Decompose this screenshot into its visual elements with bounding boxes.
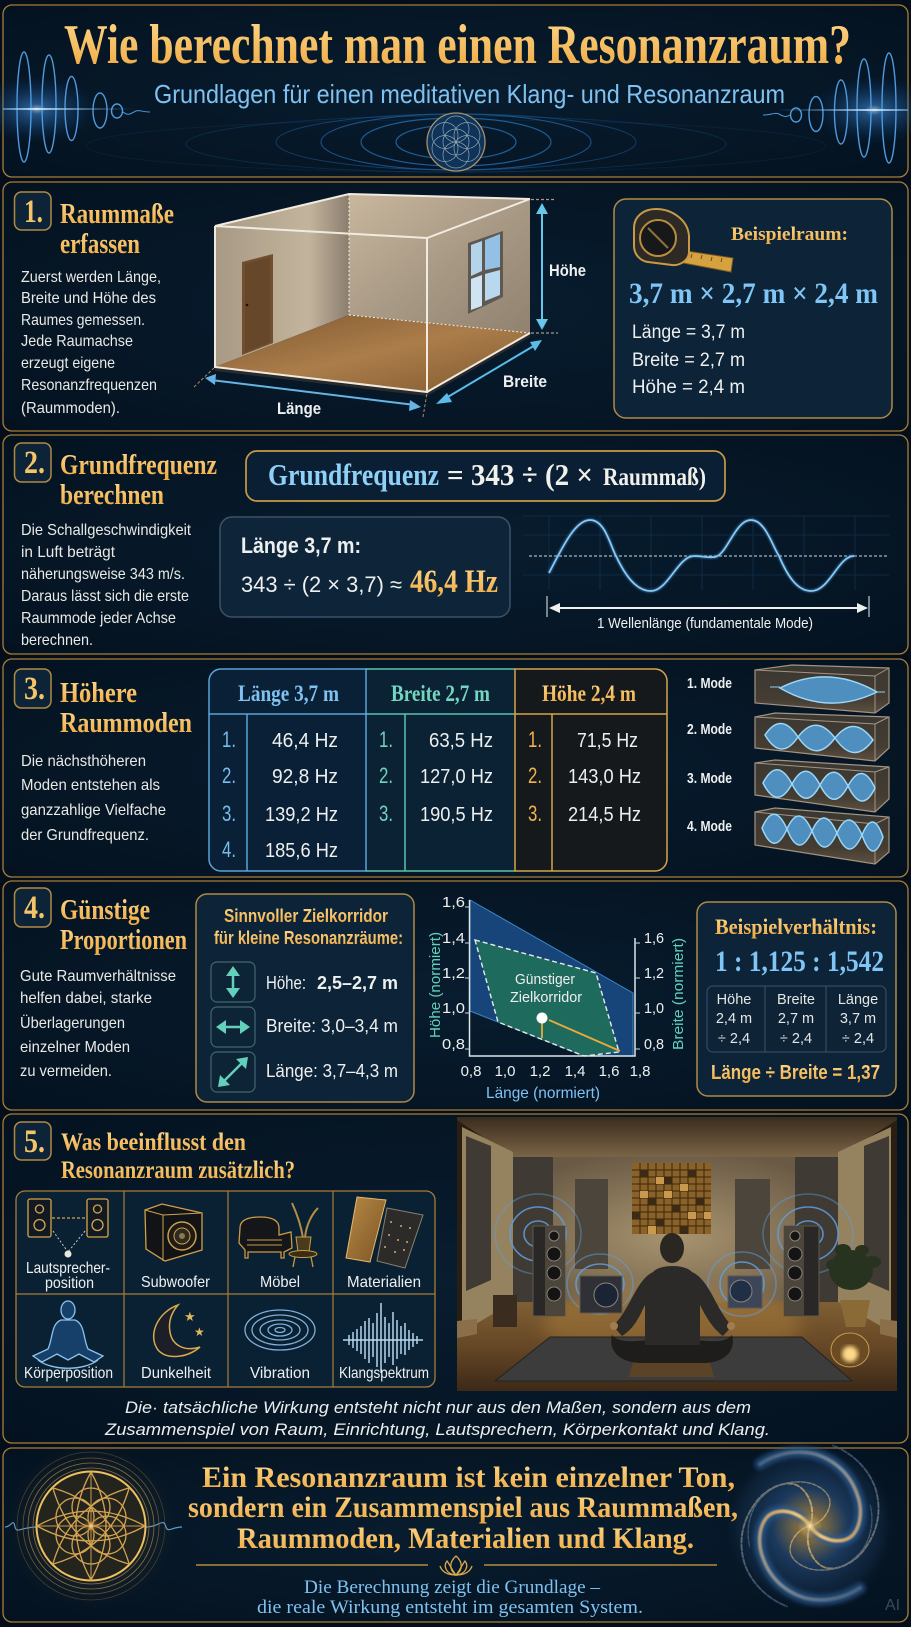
door: [242, 254, 273, 355]
heading: Raummaße: [60, 198, 174, 230]
chart: target corridor: 0,8: [461, 1063, 481, 1080]
table: room modes: 1.: [379, 727, 393, 752]
closing statement: Ein Resonanzraum ist kein einzelner Ton,: [202, 1461, 735, 1494]
arrow: Breite: [436, 340, 542, 404]
subline: [257, 1577, 643, 1618]
body text: [21, 269, 161, 417]
subtitle: Grundlagen für einen meditativen Klang- und Resonanzraum: [154, 79, 785, 109]
example room box: Länge = 3,7 m: [632, 322, 745, 343]
table: room modes: 92,8 Hz: [272, 766, 338, 788]
mode 2: 2. Mode: [687, 721, 732, 738]
chart: target corridor: 1,2: [442, 965, 465, 982]
body text: [21, 522, 192, 649]
body text: einzelner Moden: [20, 1039, 130, 1056]
icon: furniture: [239, 1203, 318, 1267]
chart: target corridor: 1,0: [442, 1000, 465, 1017]
closing statement: [188, 1461, 738, 1555]
badge 4: [14, 888, 51, 927]
wave chart: 1 Wellenlänge (fundamentale Mode): [597, 615, 813, 632]
table: room modes: Länge 3,7 m: [238, 681, 339, 706]
ratio table: ÷ 2,4: [718, 1031, 750, 1047]
mode 2: [687, 713, 889, 761]
mode 1: [687, 665, 889, 713]
heading: [60, 449, 217, 511]
mode 4: [687, 808, 889, 864]
body text: (Raummoden).: [21, 400, 120, 417]
label Breite: Breite: [503, 372, 547, 391]
heading: [60, 677, 192, 739]
closing statement: Raummoden, Materialien und Klang.: [237, 1522, 694, 1555]
label: Materialien: [347, 1274, 421, 1291]
chart: target corridor: 1,6: [442, 894, 465, 911]
heading: [61, 1129, 295, 1184]
badge 1: 1.: [24, 194, 43, 230]
panel: conclusion: [3, 1438, 908, 1622]
target corridor box: Breite: 3,0–3,4 m: [266, 1016, 398, 1036]
table: room modes: 2.: [379, 763, 393, 788]
wall art mosaic: [632, 1163, 711, 1234]
table: room modes: 3.: [222, 801, 236, 826]
ratio table: [707, 986, 886, 1052]
ratio table: ÷ 2,4: [842, 1031, 874, 1047]
table: room modes: 1.: [222, 727, 236, 752]
example room box: [614, 199, 892, 418]
caption: Die· tatsächliche Wirkung entsteht nicht nur aus den Maßen, sondern aus dem: [125, 1398, 751, 1417]
body text: erzeugt eigene: [21, 355, 115, 372]
ratio table: ÷ 2,4: [780, 1031, 812, 1047]
mode 4: 4. Mode: [687, 818, 732, 835]
factor grid: [16, 1191, 435, 1387]
table: room modes: 143,0 Hz: [568, 766, 641, 788]
body text: Breite und Höhe des: [21, 290, 156, 307]
icon: flower of life sphere: [427, 113, 485, 171]
table: room modes: 214,5 Hz: [568, 804, 641, 826]
chart: target corridor: 0,8: [442, 1036, 465, 1053]
ratio table: 2,7 m: [778, 1011, 814, 1027]
chart: target corridor: 1,0: [644, 1000, 664, 1017]
chart: target corridor: [427, 894, 687, 1102]
window: [468, 231, 503, 314]
label: Möbel: [260, 1274, 300, 1291]
arrow: wavelength: [547, 596, 869, 617]
ratio table: Höhe: [717, 992, 751, 1008]
formula box: = 343 ÷ (2 ×: [447, 457, 593, 492]
heading: erfassen: [60, 228, 140, 260]
body text: Die nächsthöheren: [21, 753, 146, 770]
label Länge: Länge: [277, 399, 321, 418]
icon: width arrow: [211, 1007, 255, 1047]
label: Körperposition: [24, 1365, 113, 1382]
heading: Raummoden: [60, 707, 192, 739]
badge 3: [14, 669, 51, 708]
chart: target corridor: 0,8: [644, 1036, 664, 1053]
icon: moon and stars: ★: [184, 1309, 196, 1324]
target corridor box: Sinnvoller Zielkorridor: [224, 906, 388, 926]
table: room modes: Höhe 2,4 m: [542, 681, 636, 706]
label: Dunkelheit: [141, 1365, 212, 1382]
rug: [495, 1337, 852, 1381]
panel: 3 Höhere Raummoden: [3, 659, 908, 877]
mode 3: [687, 760, 889, 812]
target corridor box: Länge: 3,7–4,3 m: [266, 1061, 398, 1081]
badge 2: 2.: [24, 445, 45, 481]
room illustration: [215, 194, 530, 396]
meditation room photo: [457, 1117, 897, 1391]
chart: target corridor: 1,8: [630, 1063, 650, 1080]
body text: Moden entstehen als: [21, 777, 160, 794]
table: room modes: 139,2 Hz: [265, 804, 338, 826]
speakers: [533, 1226, 819, 1316]
table: room modes: 71,5 Hz: [577, 730, 638, 752]
body text: helfen dabei, starke: [20, 990, 152, 1007]
example room box: Beispielraum:: [731, 224, 848, 245]
body text: Zuerst werden Länge,: [21, 269, 161, 286]
table: room modes: 63,5 Hz: [429, 730, 493, 752]
caption: Zusammenspiel von Raum, Einrichtung, Lautsprechern, Körperkontakt und Klang.: [104, 1420, 770, 1439]
chart: target corridor: 1,6: [599, 1063, 619, 1080]
badge 1: [14, 192, 51, 230]
calculation box: 46,4 Hz: [410, 564, 498, 600]
sound rings: [495, 1194, 853, 1316]
mode diagrams: [687, 665, 889, 864]
ripple rings: [86, 114, 826, 172]
target corridor box: Höhe:: [266, 973, 306, 993]
chart: target corridor: 1,4: [442, 930, 465, 947]
example room box: Breite = 2,7 m: [632, 350, 745, 371]
table: room modes: 2.: [222, 763, 236, 788]
chart: target corridor: 1,2: [530, 1063, 550, 1080]
body text: zu vermeiden.: [20, 1063, 112, 1080]
calculation box: Länge 3,7 m:: [241, 533, 361, 558]
panel: 4 Günstige Proportionen: [3, 881, 908, 1110]
label: Subwoofer: [141, 1274, 211, 1291]
badge 5: [14, 1122, 51, 1160]
panel: header: [0, 5, 911, 177]
table: room modes: Breite 2,7 m: [391, 681, 490, 706]
heading: Günstige: [60, 894, 150, 926]
chart: target corridor: 1,4: [565, 1063, 585, 1080]
table: room modes: 185,6 Hz: [265, 840, 338, 862]
closing statement: sondern ein Zusammenspiel aus Raummaßen,: [188, 1491, 738, 1524]
icon: speaker position: [28, 1199, 108, 1258]
caption: [104, 1398, 770, 1439]
icon: sound spectrum: [343, 1303, 423, 1373]
label: Klangspektrum: [339, 1365, 429, 1382]
body text: Jede Raumachse: [21, 333, 133, 350]
target corridor box: für kleine Resonanzräume:: [214, 928, 403, 948]
label: Lautsprecher-: [26, 1260, 110, 1277]
table: room modes: 3.: [379, 801, 393, 826]
formula box: Raummaß): [603, 464, 706, 491]
acoustic panels: [466, 1136, 889, 1302]
body text: Daraus lässt sich die erste: [21, 588, 189, 605]
table: room modes: 4.: [222, 837, 236, 862]
heading: Höhere: [60, 677, 137, 709]
label: position: [45, 1275, 94, 1292]
body text: Raumes gemessen.: [21, 312, 145, 329]
body text: der Grundfrequenz.: [21, 827, 149, 844]
body text: in Luft beträgt: [21, 544, 116, 561]
icon: left sound wave: [0, 52, 150, 162]
table: room modes: 3.: [528, 801, 542, 826]
ratio table: 3,7 m: [840, 1011, 876, 1027]
heading: [60, 894, 187, 956]
mode 1: 1. Mode: [687, 675, 732, 692]
calculation box: 343 ÷ (2 × 3,7) ≈: [241, 572, 402, 597]
table: room modes: 1.: [528, 727, 542, 752]
formula box: [246, 451, 725, 501]
chart: target corridor: 1,2: [644, 965, 664, 982]
body text: Resonanzfrequenzen: [21, 377, 157, 394]
wave chart: [523, 516, 889, 632]
body text: Die Schallgeschwindigkeit: [21, 522, 192, 539]
table: room modes: 46,4 Hz: [272, 730, 338, 752]
heading: [60, 198, 174, 260]
AI mark: AI: [885, 1597, 900, 1614]
icon: subwoofer: [145, 1204, 202, 1261]
body text: [20, 968, 176, 1080]
table: room modes: 2.: [528, 763, 542, 788]
chart: target corridor: Breite (normiert): [670, 938, 687, 1050]
icon: materials: [346, 1197, 423, 1268]
icon: height arrow: [211, 962, 255, 1002]
table: room modes: [209, 669, 667, 871]
badge 2: [14, 443, 51, 482]
icon: right sound wave: [763, 53, 911, 163]
body text: näherungsweise 343 m/s.: [21, 566, 185, 583]
table: room modes: 127,0 Hz: [420, 766, 493, 788]
ratio table: 2,4 m: [716, 1011, 752, 1027]
chart: target corridor: 1,0: [495, 1063, 515, 1080]
example room box: 3,7 m × 2,7 m × 2,4 m: [629, 277, 878, 310]
heading: Was beeinflusst den: [61, 1129, 246, 1156]
calculation box: [220, 517, 510, 617]
plant and lamp: [457, 1244, 897, 1367]
subline: die reale Wirkung entsteht im gesamten System.: [257, 1597, 643, 1618]
ratio box: Beispielverhältnis:: [715, 914, 877, 939]
icon: galaxy spiral: [716, 1438, 904, 1614]
icon: vibration: [245, 1310, 315, 1350]
icon: moon and stars: ★: [194, 1325, 205, 1339]
panel: 5 Was beeinflusst den Resonanzraum: [3, 1114, 908, 1443]
example room box: Höhe = 2,4 m: [632, 377, 745, 398]
body text: Überlagerungen: [20, 1014, 125, 1032]
heading: berechnen: [60, 479, 164, 511]
label: Vibration: [250, 1365, 310, 1382]
ratio table: Breite: [777, 992, 815, 1008]
heading: Resonanzraum zusätzlich?: [61, 1157, 295, 1184]
icon: moon and stars: [154, 1305, 205, 1356]
body text: [21, 753, 166, 844]
ratio box: [697, 902, 896, 1096]
badge 3: 3.: [24, 671, 45, 707]
icon: length arrow: [211, 1052, 255, 1092]
icon: golden mandala: [5, 1441, 182, 1611]
badge 4: 4.: [24, 890, 45, 926]
meditating person: [610, 1233, 735, 1377]
ratio box: 1 : 1,125 : 1,542: [715, 945, 884, 978]
body text: Raummode jeder Achse: [21, 610, 176, 627]
chart: target corridor: Höhe (normiert): [427, 932, 444, 1038]
ratio table: Länge: [838, 992, 878, 1008]
body text: Gute Raumverhältnisse: [20, 968, 176, 985]
chart: target corridor: Günstiger: [515, 971, 575, 988]
target corridor box: [196, 894, 414, 1102]
panel: 2 Grundfrequenz berechnen: [3, 435, 908, 654]
chart: target corridor: Zielkorridor: [510, 989, 582, 1006]
body text: berechnen.: [21, 632, 93, 649]
table: room modes: 190,5 Hz: [420, 804, 493, 826]
label Höhe: Höhe: [549, 261, 586, 280]
arrow: Höhe: [531, 200, 558, 333]
chart: target corridor: 1,6: [644, 930, 664, 947]
arrow: Länge: [194, 368, 427, 417]
icon: body position: [33, 1301, 103, 1368]
heading: Grundfrequenz: [60, 449, 217, 481]
target corridor box: 2,5–2,7 m: [317, 973, 398, 993]
badge 5: 5.: [24, 1124, 45, 1160]
mode 3: 3. Mode: [687, 770, 732, 787]
chart: target corridor: Länge (normiert): [486, 1085, 600, 1102]
heading: Proportionen: [60, 924, 187, 956]
subline: Die Berechnung zeigt die Grundlage –: [304, 1577, 601, 1598]
panel: 1 Raummaße erfassen: [3, 182, 908, 431]
body text: ganzzahlige Vielfache: [21, 802, 166, 819]
icon: lotus: [440, 1556, 472, 1575]
formula box: Grundfrequenz: [268, 457, 439, 492]
ratio box: Länge ÷ Breite = 1,37: [711, 1062, 880, 1084]
icon: tape measure: [634, 209, 733, 272]
